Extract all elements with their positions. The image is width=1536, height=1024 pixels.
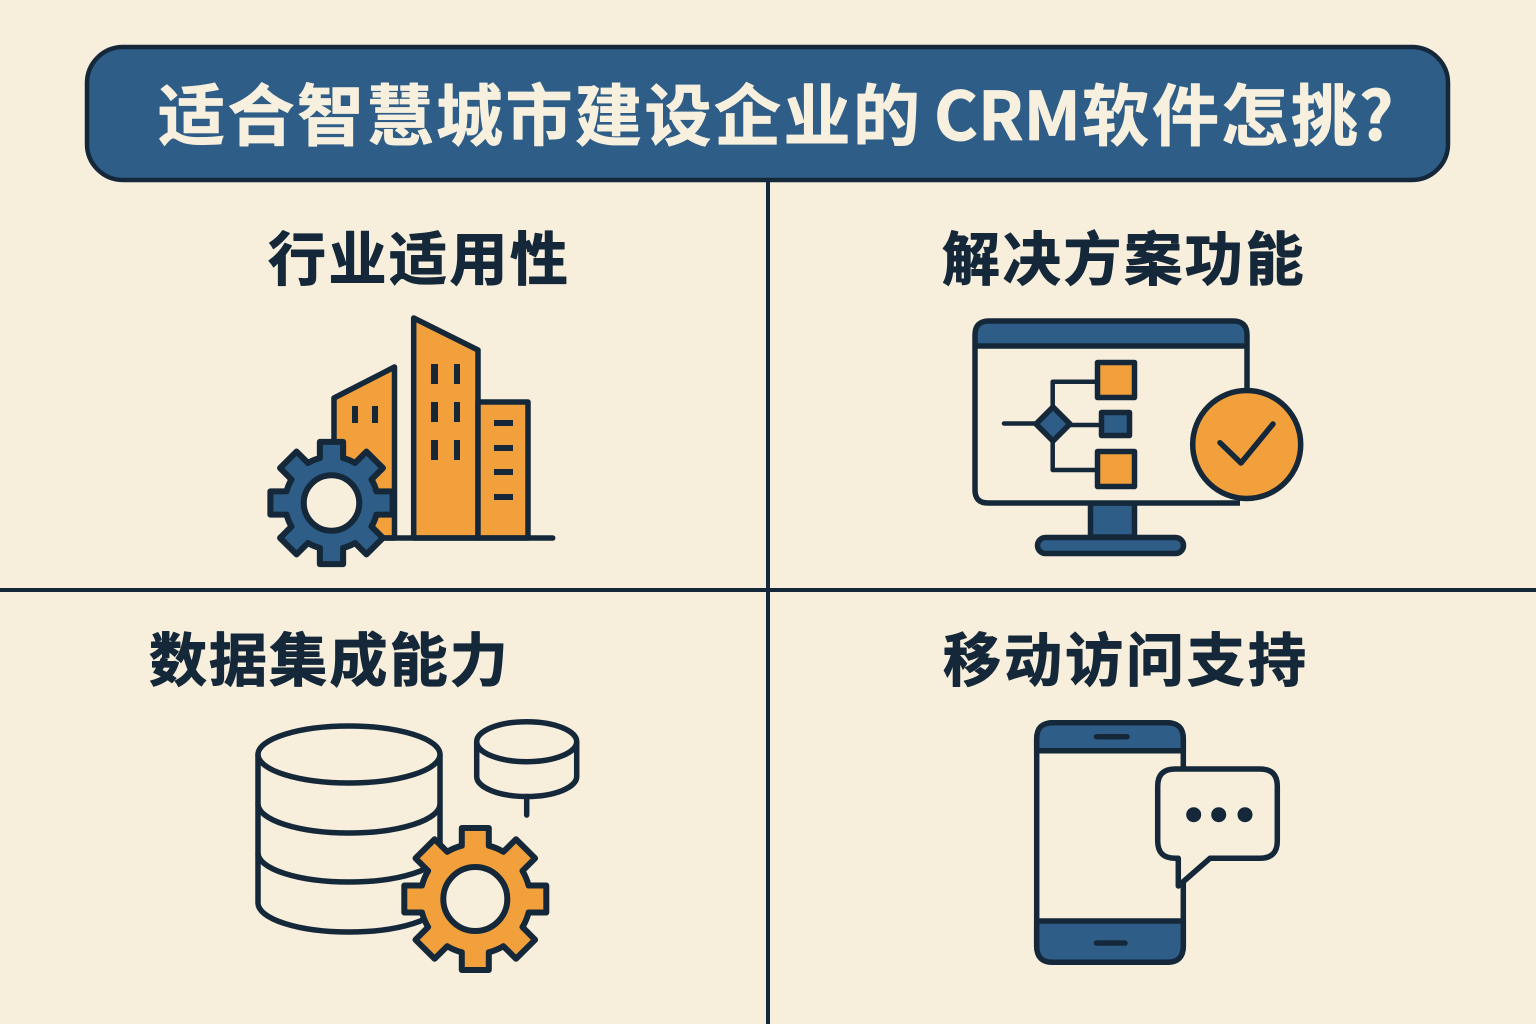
icon: monitor with flowchart and check badge [975, 321, 1301, 554]
title text: CRM [934, 63, 1081, 160]
icon: databases with gear [258, 722, 577, 970]
middle building [414, 318, 478, 538]
left building [334, 367, 394, 538]
phone top bar [1037, 723, 1183, 751]
blue gear [270, 442, 393, 564]
heading: mobile access: 移动访问支持 [943, 614, 1306, 698]
monitor screen [975, 346, 1247, 503]
flowchart bottom box [1098, 452, 1134, 486]
phone body [1037, 723, 1183, 962]
flowchart connectors [1004, 382, 1102, 470]
orange gear [404, 828, 546, 970]
flowchart middle box [1102, 412, 1130, 436]
monitor base [1038, 538, 1184, 554]
chat bubble [1158, 769, 1277, 886]
windows [352, 364, 513, 500]
phone bottom bar [1037, 921, 1183, 962]
monitor title bar [975, 321, 1247, 346]
heading: solution features: 解决方案功能 [942, 213, 1304, 297]
title banner [87, 47, 1448, 180]
title text: 软件怎挑? [1082, 63, 1393, 160]
title text: 适合智慧城市建设企业的 [158, 63, 920, 160]
large database top [258, 726, 440, 783]
small database connector [524, 796, 529, 815]
monitor stand [1090, 503, 1134, 537]
banner background [87, 47, 1448, 180]
flowchart top box [1098, 362, 1134, 398]
heading: industry fit: 行业适用性 [268, 213, 568, 297]
check badge [1193, 390, 1301, 498]
small database body [477, 742, 577, 796]
heading: data integration: 数据集成能力 [149, 614, 508, 698]
chat dots [1186, 807, 1252, 822]
large database body [258, 754, 440, 932]
check mark [1220, 424, 1273, 463]
phone speaker and home pills [1096, 737, 1127, 943]
flowchart decision diamond [1036, 407, 1070, 441]
right building [478, 402, 528, 538]
ground line [380, 535, 553, 541]
icon: smartphone with chat bubble [1037, 723, 1277, 962]
large database rings [258, 804, 440, 882]
icon: city buildings with gear [270, 318, 553, 564]
small database top [477, 722, 577, 762]
